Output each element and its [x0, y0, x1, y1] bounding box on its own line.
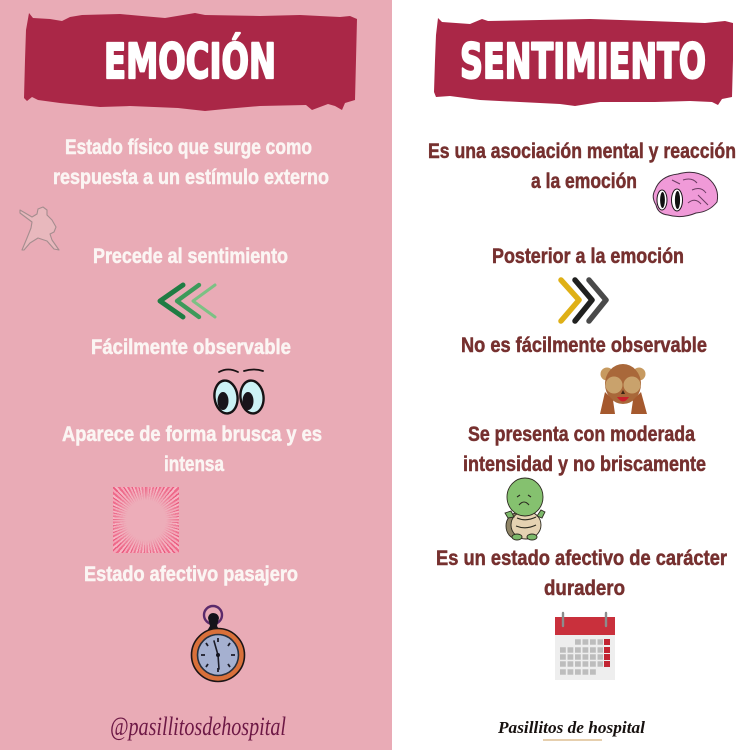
- text: definición emoción: respuesta a un estímulo externo: [53, 166, 329, 189]
- icon: running figure: [20, 207, 59, 250]
- icon: right chevrons: [561, 280, 606, 321]
- text: observable: Fácilmente observable: [91, 336, 291, 359]
- heading banner: emoción: [24, 13, 357, 111]
- text: moderada intensidad: intensidad y no briscamente: [463, 453, 706, 476]
- text: posterior: Posterior a la emoción: [492, 245, 684, 268]
- text: pasajero: Estado afectivo pasajero: [84, 563, 298, 586]
- icon: turtle: [505, 478, 545, 540]
- footer handle: @pasillitosdehospital: [110, 712, 286, 741]
- icon: cartoon eyes: [213, 370, 265, 415]
- text: definición sentimiento: a la emoción: [531, 170, 637, 193]
- text: no observable: No es fácilmente observable: [461, 334, 707, 357]
- icon: calendar: [555, 613, 615, 680]
- text: precede: Precede al sentimiento: [93, 245, 288, 268]
- text: brusca e intensa: Aparece de forma brusca y es: [62, 423, 322, 446]
- panel: sentimiento: [428, 18, 736, 740]
- text: duradero: duradero: [544, 577, 625, 600]
- icon: pink burst: [113, 487, 179, 553]
- text: definición emoción: [53, 136, 329, 189]
- heading banner: sentimiento: [434, 18, 733, 106]
- text: definición sentimiento: [428, 140, 736, 193]
- footer signature: Pasillitos de hospital: [497, 718, 645, 737]
- text: duradero: [436, 547, 727, 600]
- panel: emoción: [0, 0, 392, 750]
- text: moderada intensidad: Se presenta con moderada: [468, 423, 695, 446]
- text: brusca e intensa: [62, 423, 322, 476]
- icon: pocket watch: [192, 606, 244, 682]
- text: brusca e intensa: intensa: [164, 453, 224, 476]
- icon: brain: [653, 172, 718, 217]
- icon: green left chevrons: [160, 285, 215, 317]
- icon: monkey covering eyes: [600, 364, 647, 414]
- text: definición emoción: Estado físico que surge como: [65, 136, 312, 159]
- text: moderada intensidad: [463, 423, 706, 476]
- heading banner: emoción: EMOCIÓN: [104, 33, 276, 90]
